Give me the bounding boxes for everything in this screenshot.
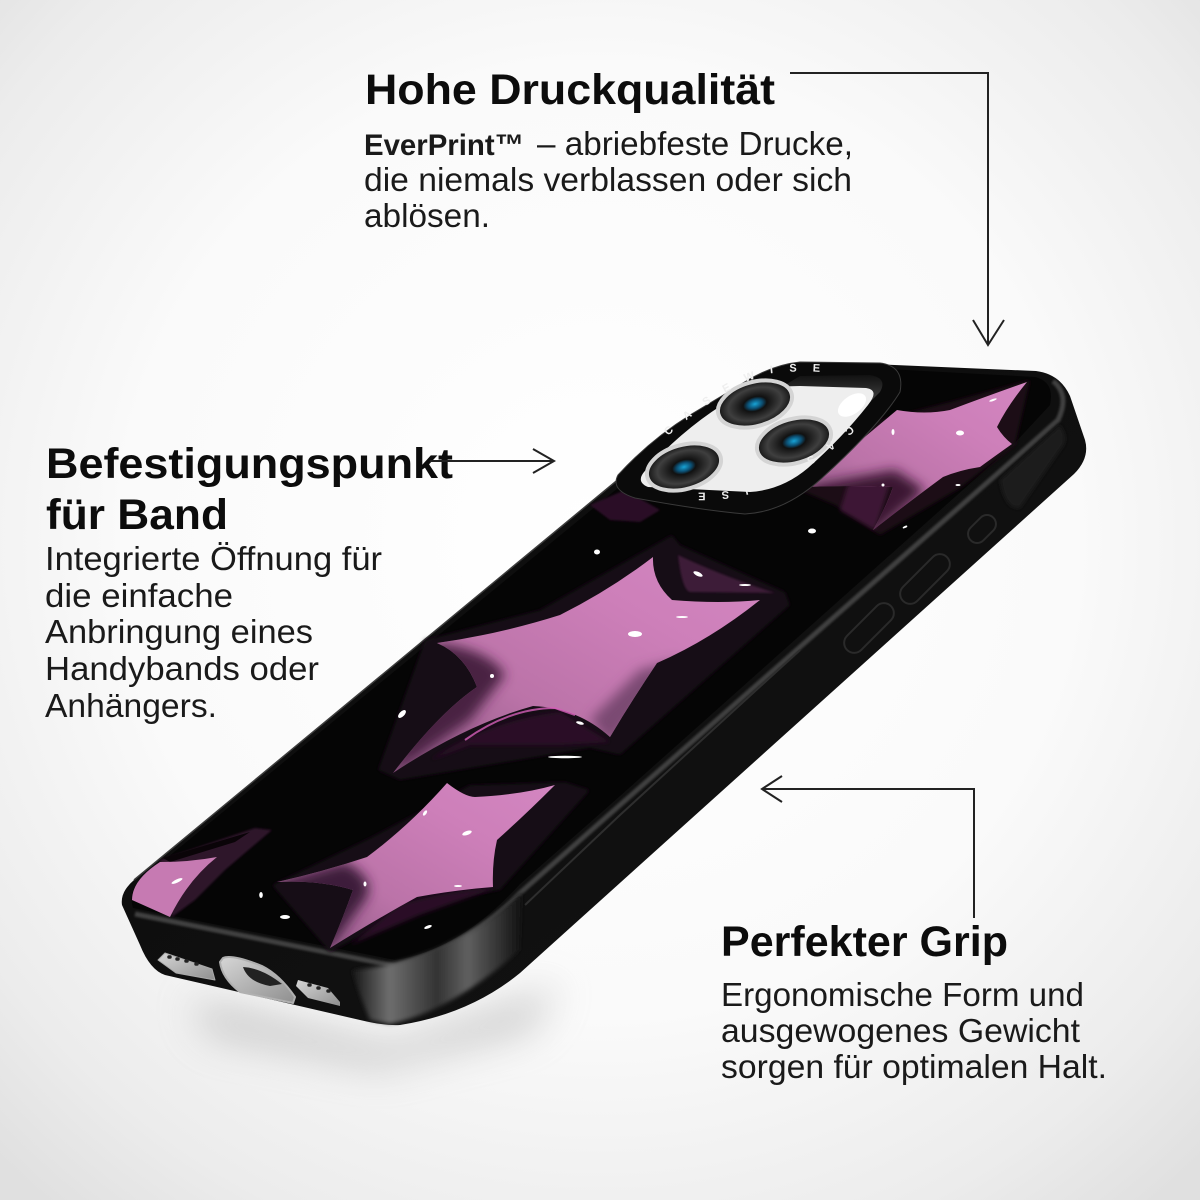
phone shadow <box>190 985 560 1068</box>
star edge glow <box>465 708 575 740</box>
heading: Befestigungspunkt <box>46 440 453 488</box>
star shading <box>277 862 369 948</box>
heading <box>46 440 453 539</box>
body text: Anbringung eines <box>45 613 313 650</box>
body text <box>45 540 382 724</box>
brand text top: CASEWISE <box>664 364 820 434</box>
big centre star <box>378 535 790 780</box>
body text: ausgewogenes Gewicht <box>721 1012 1080 1049</box>
left edge highlight <box>134 478 620 880</box>
body text: EverPrint™ <box>364 129 524 162</box>
body text: die einfache <box>45 577 233 614</box>
body text: die niemals verblassen oder sich <box>364 161 852 198</box>
corner sheen <box>352 893 522 1024</box>
camera module <box>616 362 902 514</box>
body text: Anhängers. <box>45 687 217 724</box>
specular dots <box>259 484 960 930</box>
star shading <box>393 643 680 773</box>
port opening <box>243 967 282 986</box>
callout: grip <box>721 918 1107 1085</box>
callout: strap attachment <box>45 440 453 724</box>
USB port <box>220 957 295 1003</box>
brand text bottom: CASEWISE <box>698 426 854 500</box>
star purple lobe <box>840 478 890 530</box>
star halo <box>378 535 790 780</box>
speaker left <box>158 953 215 980</box>
body text: sorgen für optimalen Halt. <box>721 1048 1107 1085</box>
side strap recess <box>1000 425 1065 508</box>
camera ring <box>616 362 901 514</box>
arrow: strap attachment <box>430 449 554 473</box>
phone case <box>122 362 1086 1027</box>
camera glass <box>641 386 874 492</box>
arrow: grip <box>762 776 974 918</box>
speaker grille <box>158 953 215 980</box>
speaker right <box>296 980 340 1006</box>
star lower purple <box>350 888 495 945</box>
small star tip by camera <box>590 490 660 522</box>
corner star <box>132 828 272 917</box>
star halo <box>272 782 590 952</box>
star halo <box>800 380 1030 535</box>
star glint <box>171 877 183 885</box>
side buttons <box>840 511 1000 657</box>
arrow: print quality <box>790 73 1004 345</box>
port surround <box>220 957 295 1003</box>
heading: Perfekter Grip <box>721 918 1008 966</box>
star glints <box>882 398 997 486</box>
body text: Handybands oder <box>45 650 319 687</box>
lens right <box>751 409 837 473</box>
body text: ablösen. <box>364 197 490 234</box>
lens left <box>641 435 727 499</box>
body text: Ergonomische Form und <box>721 976 1084 1013</box>
back face <box>132 366 1051 960</box>
star pink part <box>132 857 217 917</box>
star glints <box>364 810 472 887</box>
case body <box>122 362 1086 1025</box>
camera inner wall <box>760 375 882 412</box>
lower star <box>272 782 590 952</box>
top right star <box>800 380 1030 535</box>
star inner shade <box>805 470 925 535</box>
body text <box>364 125 853 234</box>
speaker grille <box>296 980 340 1006</box>
star black fold <box>163 832 250 862</box>
flash <box>834 388 870 422</box>
body text: – abriebfeste Drucke, <box>537 125 853 162</box>
side lower highlight <box>525 650 800 905</box>
lens top <box>712 372 798 436</box>
side sheen rim <box>135 381 1063 966</box>
star upper purple lobe <box>678 555 775 593</box>
callout: print quality <box>364 66 853 234</box>
star shape <box>393 557 760 773</box>
body text: Integrierte Öffnung für <box>45 540 382 577</box>
star shape <box>805 382 1027 530</box>
heading: für Band <box>46 491 228 539</box>
star lower purple lobe <box>430 712 610 760</box>
body text <box>721 976 1107 1085</box>
heading: Hohe Druckqualität <box>365 66 775 114</box>
star dark part <box>160 828 272 917</box>
star shape <box>277 783 555 948</box>
star glints <box>490 570 751 758</box>
